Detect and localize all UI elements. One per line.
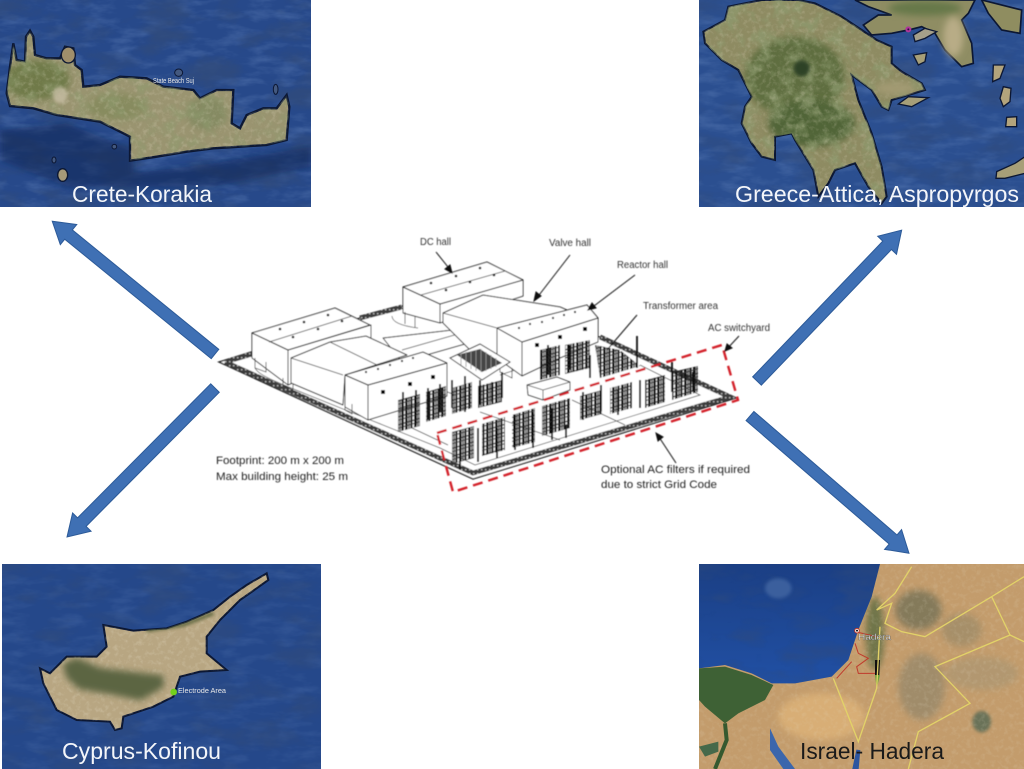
callout: Valve hall [534, 238, 591, 301]
building: middle connector [383, 328, 472, 362]
map panel: Greece-Attica, Aspropyrgos [699, 0, 1024, 207]
map panel: Cyprus-Kofinou [2, 564, 321, 769]
red dashed area: optional AC filters [437, 345, 738, 492]
building: left hall [252, 308, 371, 390]
footprint note [216, 455, 348, 483]
callout: Reactor hall: Reactor hall [617, 260, 668, 271]
building: centre hall [345, 352, 447, 420]
arrow: to Greece [748, 221, 911, 390]
arrow: to Cyprus [58, 379, 224, 546]
transformer block [450, 344, 510, 380]
building: valve hall [443, 295, 590, 368]
site base plate [219, 306, 736, 479]
building: reactor hall [497, 305, 598, 378]
map panel: Israel-Hadera [699, 564, 1024, 769]
map marker label: State Beach: State Beach Suj [153, 78, 194, 85]
building: lower hall [291, 336, 407, 405]
callout: Reactor hall [588, 260, 668, 310]
arrow: to Israel [742, 406, 917, 563]
callout: optional AC filters: due to strict Grid Code [601, 479, 717, 491]
footprint note: Footprint: 200 m x 200 m [216, 455, 344, 467]
callout: optional AC filters [601, 433, 750, 491]
building: DC hall [392, 262, 523, 328]
map panel: Crete-Korakia [0, 0, 311, 207]
heading: Israel- Hadera: Israel- Hadera [800, 738, 944, 764]
callout: Valve hall: Valve hall [549, 238, 591, 249]
callout: DC hall [420, 237, 452, 273]
map marker label: Hadera: Hadera [858, 632, 891, 642]
heading: Greece-Attica, Aspropyrgos: Greece-Attica, Aspropyrgos [735, 181, 1019, 207]
converter station diagram [216, 237, 770, 492]
callout: AC switchyard: AC switchyard [708, 323, 770, 334]
callout: optional AC filters: Optional AC filters if required [601, 464, 750, 476]
heading: Cyprus-Kofinou: Cyprus-Kofinou [62, 738, 221, 764]
perimeter fence [225, 307, 730, 473]
callout: Transformer area: Transformer area [643, 301, 718, 312]
small building [527, 377, 570, 400]
callout: Transformer area [607, 301, 718, 350]
callout: DC hall: DC hall [420, 237, 451, 248]
heading: Crete-Korakia: Crete-Korakia [72, 181, 212, 207]
footprint note: Max building height: 25 m [216, 471, 348, 483]
map marker label: Electrode Area: Electrode Area [178, 686, 227, 695]
callout: AC switchyard [708, 323, 770, 351]
switchyard equipment [398, 336, 698, 470]
arrow: to Crete [44, 211, 223, 364]
interior roads [255, 345, 700, 465]
